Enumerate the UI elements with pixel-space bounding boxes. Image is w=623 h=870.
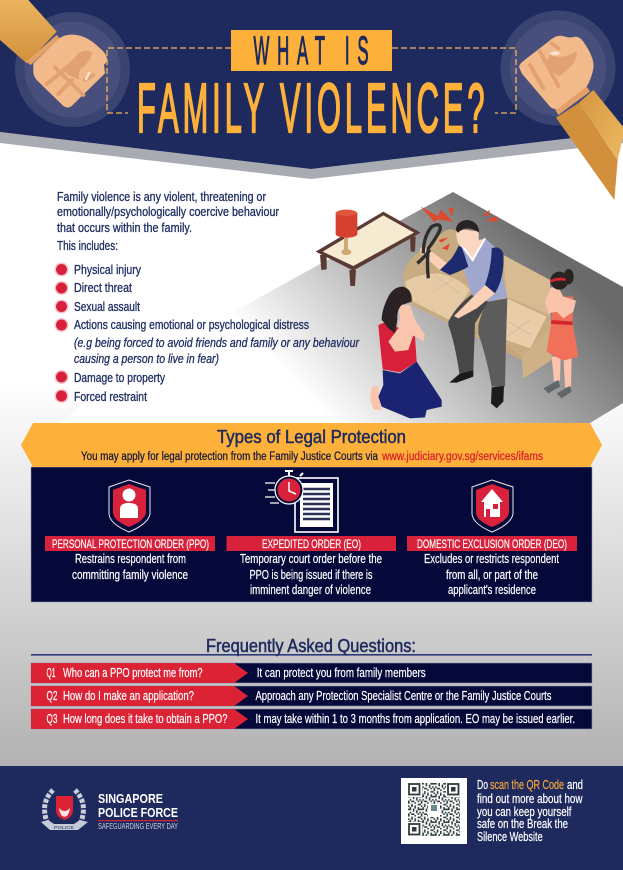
- intro text block: that occurs within the family.: [57, 221, 192, 235]
- panel: frequently asked questions: [31, 635, 592, 729]
- bullet list: Sexual assault: [74, 300, 140, 314]
- QR call to action: Silence Website: [477, 830, 543, 844]
- FAQ row 1: Who can a PPO protect me from?: [63, 666, 203, 680]
- ribbon heading: You may apply for legal protection from the Family Justice Courts via: [81, 451, 379, 463]
- dashed frame: [107, 48, 516, 113]
- logo wordmark: [98, 791, 178, 831]
- icon: DEO house shield: [472, 480, 513, 532]
- logo: Singapore Police Force crest: [41, 790, 88, 830]
- logo wordmark: SINGAPORE: [98, 791, 163, 806]
- FAQ row 2: [31, 686, 592, 706]
- footer: [0, 766, 623, 870]
- bullet list: (e.g being forced to avoid friends and family or any behaviour: [74, 336, 360, 350]
- title box: what is: WHAT IS: [254, 29, 376, 73]
- anger marks: [421, 207, 497, 250]
- FAQ row 3: How long does it take to obtain a PPO?: [63, 712, 228, 726]
- intro text block: This includes:: [57, 239, 118, 253]
- QR call to action: you can keep yourself: [477, 805, 572, 819]
- icon: expedited clock and document: [265, 471, 338, 532]
- ribbon heading: www.judiciary.gov.sg/services/ifams: [381, 451, 543, 463]
- scene figures: [316, 207, 578, 418]
- bullet list: [54, 262, 360, 404]
- order: PPO: PERSONAL PROTECTION ORDER (PPO): [52, 537, 209, 551]
- bullet list: Forced restraint: [74, 390, 147, 404]
- left fist: [0, 0, 130, 127]
- sofa: [403, 229, 552, 378]
- order: EO: PPO is being issued if there is: [250, 568, 372, 582]
- order: DEO: from all, or part of the: [446, 568, 538, 582]
- order: EO: EXPEDITED ORDER (EO): [262, 537, 361, 551]
- order: DEO: [407, 536, 577, 597]
- order: DEO: applicant's residence: [448, 583, 536, 597]
- QR call to action: Do: [477, 778, 488, 792]
- bullet list: causing a person to live in fear): [74, 352, 219, 366]
- bullet list: Physical injury: [74, 263, 142, 277]
- order: PPO: Restrains respondent from: [75, 552, 186, 566]
- coffee table with lamp: [316, 210, 421, 286]
- order: PPO: committing family violence: [72, 568, 188, 582]
- ribbon heading: Types of Legal Protection: [217, 426, 406, 447]
- QR call to action: [477, 778, 583, 844]
- bullet list: Direct threat: [74, 281, 132, 295]
- ribbon heading: [21, 423, 602, 467]
- illustration: family violence scene: [60, 192, 623, 423]
- FAQ row 3: [31, 709, 592, 729]
- title: family violence: FAMILY VIOLENCE?: [137, 70, 488, 148]
- bullet list: Actions causing emotional or psychological distress: [74, 318, 309, 332]
- navy panel: [31, 467, 592, 602]
- order: EO: Temporary court order before the: [240, 552, 382, 566]
- woman kneeling: [370, 287, 442, 418]
- QR call to action: safe on the Break the: [477, 817, 568, 831]
- intro text block: [57, 190, 279, 253]
- man raising belt: [417, 220, 507, 408]
- bullet list: Damage to property: [74, 371, 166, 385]
- order: DEO: Excludes or restricts respondent: [424, 552, 559, 566]
- FAQ row 2: Q2: [46, 689, 58, 703]
- floor: [60, 192, 623, 423]
- QR call to action: scan the QR Code: [490, 778, 564, 792]
- QR call to action: find out more about how: [477, 792, 583, 806]
- QR code: [401, 778, 467, 844]
- logo wordmark: POLICE FORCE: [98, 805, 178, 820]
- logo wordmark: SAFEGUARDING EVERY DAY: [98, 822, 178, 831]
- belt: [417, 225, 440, 278]
- right fist: [500, 10, 623, 200]
- FAQ row 1: It can protect you from family members: [257, 666, 426, 680]
- panel: types of legal protection: [21, 423, 602, 602]
- intro text block: Family violence is any violent, threatening or: [57, 190, 266, 204]
- FAQ heading: Frequently Asked Questions:: [206, 635, 416, 656]
- QR call to action: and: [567, 778, 583, 792]
- FAQ row 1: [31, 663, 592, 683]
- order: PPO: [45, 536, 215, 582]
- girl crying: [543, 269, 578, 398]
- order: EO: imminent danger of violence: [250, 583, 371, 597]
- FAQ row 1: Q1: [46, 666, 56, 680]
- icon: PPO shield: [109, 480, 150, 532]
- header banner: [0, 0, 623, 200]
- logo: Singapore Police Force crest: POLICE: [54, 825, 74, 830]
- intro text block: emotionally/psychologically coercive behaviour: [57, 205, 279, 219]
- FAQ row 3: Q3: [46, 712, 58, 726]
- FAQ row 2: How do I make an application?: [63, 689, 194, 703]
- order: EO: [226, 536, 396, 597]
